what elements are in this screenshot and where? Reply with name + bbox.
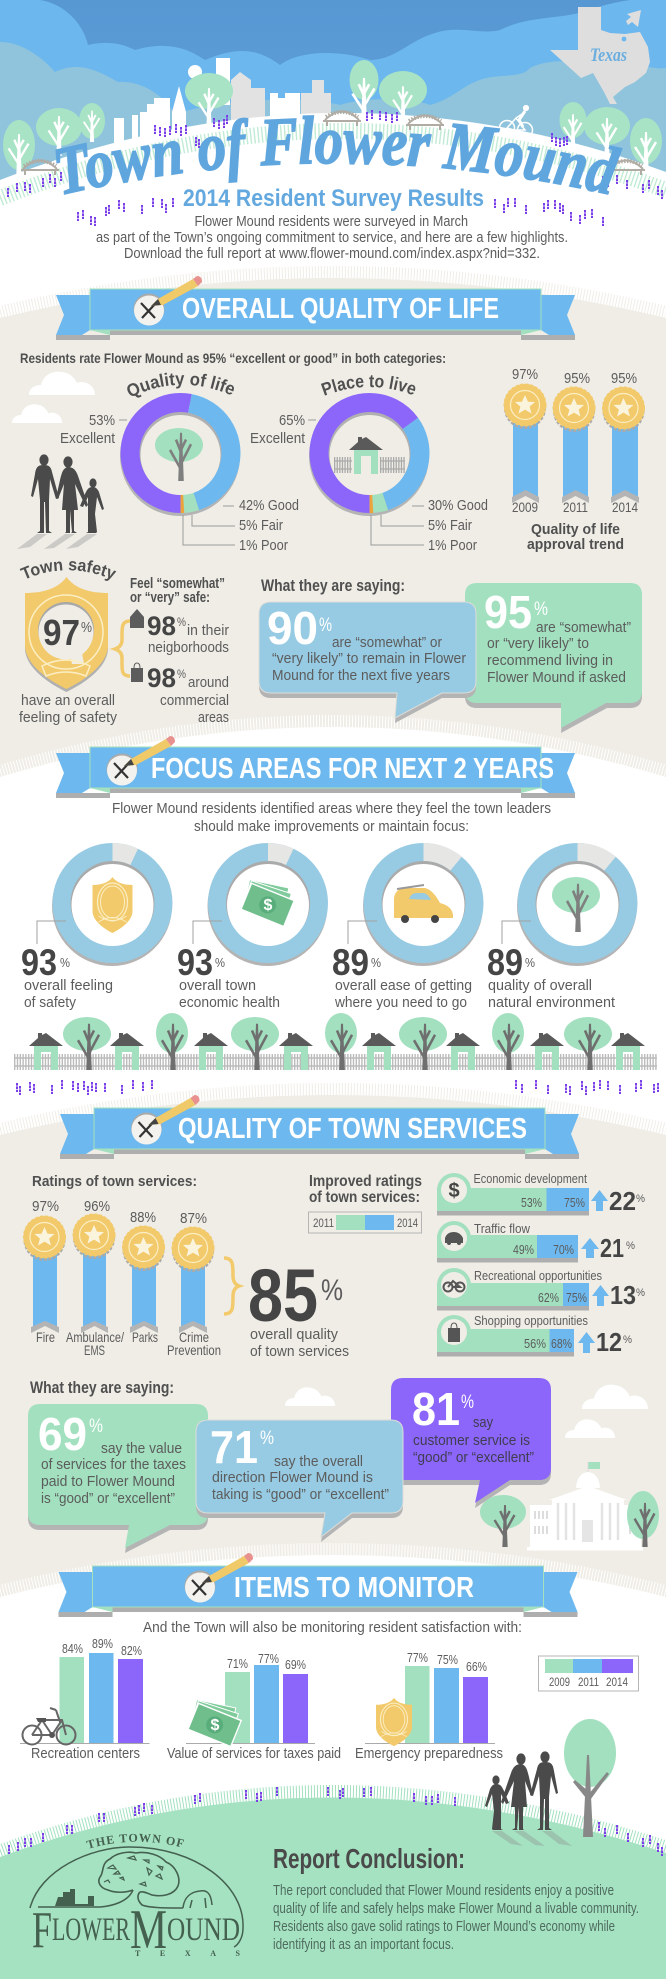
speech bubble: 71%: 71 — [210, 1421, 258, 1473]
logo: town of flower mound: F — [32, 1902, 52, 1959]
bar chart: recreation centers — [20, 1636, 150, 1762]
section heading: items to monitor: ITEMS TO MONITOR — [234, 1572, 474, 1604]
green hill — [0, 1791, 666, 1979]
Texas map with locator: Texas — [590, 45, 627, 66]
page background: sky — [0, 0, 666, 300]
bar chart: emergency preparedness — [355, 1650, 503, 1762]
focus intro: should make improvements or maintain focus: — [194, 818, 469, 835]
logo: town of flower mound: OUND — [167, 1912, 240, 1948]
speech bubble: 69% — [28, 1404, 208, 1553]
focus intro — [112, 800, 551, 835]
chart legend: 2014 — [606, 1675, 628, 1689]
donut: place to live: 30% Good — [428, 497, 488, 514]
city skyline — [114, 58, 331, 150]
town safety badge: % — [81, 619, 92, 636]
tree — [564, 1719, 616, 1837]
icon: family — [17, 454, 104, 549]
bar: economic development: 22 — [609, 1186, 636, 1216]
feel safe stats: % — [177, 615, 186, 629]
feel safe stats: in their — [187, 622, 229, 639]
bar: economic development: $ — [448, 1180, 460, 1202]
speech bubble: 90%: 90 — [267, 602, 318, 654]
intro text: Download the full report at www.flower-mound.com/index.aspx?nid=332. — [124, 245, 540, 262]
focus donut: economy: overall town — [179, 977, 256, 994]
lavender on green hill — [9, 1787, 662, 1856]
focus donut: economy: $ — [264, 897, 273, 914]
speech bubble: 90%: are “somewhat” or — [332, 634, 442, 651]
feel safe stats: around — [188, 674, 229, 691]
donut: quality of life: Excellent — [60, 430, 116, 447]
section heading: quality of town services: QUALITY OF TOWN SERVICES — [178, 1113, 527, 1145]
bar chart: recreation centers: 89% — [92, 1636, 113, 1651]
speech bubble: 90% — [259, 602, 476, 723]
speech bubble: 81%: “good” or “excellent” — [413, 1449, 534, 1466]
donut: quality of life: 53% — [89, 412, 115, 429]
feel safe stats — [115, 575, 229, 726]
85% overall quality: of town services — [250, 1343, 349, 1360]
chart legend — [538, 1656, 638, 1691]
focus donut: getting around: % — [371, 955, 381, 970]
section background: beige 2 — [0, 1089, 666, 1597]
logo: town of flower mound: M — [130, 1899, 167, 1961]
speech bubble: 81%: 81 — [412, 1383, 460, 1435]
focus donut: getting around: 89 — [332, 942, 369, 983]
approval trend ribbons: 95% — [564, 370, 590, 387]
approval trend ribbons: Quality of life — [531, 521, 620, 538]
donut: place to live: Excellent — [250, 430, 306, 447]
clouds — [285, 1385, 648, 1438]
bar: economic development: Economic development — [474, 1171, 587, 1186]
85% overall quality — [224, 1254, 349, 1360]
heading: what they are saying: What they are saying: — [30, 1378, 174, 1397]
bar chart: recreation centers: Recreation centers — [31, 1745, 140, 1762]
icon: cyclist — [500, 105, 532, 138]
bar: economic development: 53% — [521, 1195, 542, 1210]
bar: shopping opportunities: 68% — [551, 1336, 572, 1351]
approval trend ribbons: 2011 — [563, 499, 588, 515]
report conclusion text — [273, 1882, 639, 1953]
white hill — [0, 113, 666, 300]
speech bubble: 90%: % — [319, 615, 332, 636]
Texas map with locator — [550, 7, 650, 104]
focus donut: safety: % — [60, 955, 70, 970]
section heading: focus areas — [56, 736, 575, 798]
bar: shopping opportunities: Shopping opportunities — [474, 1313, 588, 1328]
focus donut: natural environment — [487, 843, 638, 1011]
speech bubble: 69%: paid to Flower Mound — [41, 1473, 175, 1490]
donut: place to live: 5% Fair — [428, 517, 472, 534]
section heading: quality of town services — [60, 1095, 579, 1159]
focus donut: safety: overall feeling — [24, 977, 113, 994]
bar: recreational opportunities — [437, 1268, 645, 1310]
donut: place to live: 65% — [279, 412, 305, 429]
ratings of town services: 88% — [130, 1209, 156, 1226]
bar: recreational opportunities: 13 — [610, 1280, 636, 1310]
ratings of town services: 87% — [180, 1210, 207, 1227]
bar chart: value of services: 69% — [285, 1657, 306, 1672]
intro text: as part of the Town’s ongoing commitment to service, and here are a few highlights. — [96, 229, 568, 246]
speech bubble: 90%: Mound for the next five years — [272, 667, 450, 684]
approval trend ribbons: 2009 — [512, 499, 538, 515]
improved ratings legend — [308, 1173, 422, 1233]
speech bubble: 95%: recommend living in — [487, 652, 613, 669]
focus donut: economy: % — [215, 955, 225, 970]
ratings of town services: 96% — [84, 1198, 110, 1215]
bar: economic development — [437, 1171, 645, 1216]
improved ratings legend: of town services: — [309, 1189, 420, 1206]
bar: recreational opportunities: 62% — [538, 1290, 559, 1305]
speech bubble: 95% — [465, 583, 642, 733]
speech bubble: 81%: customer service is — [413, 1432, 530, 1449]
speech bubble: 69%: % — [89, 1416, 103, 1437]
donut: place to live — [250, 375, 488, 554]
ratings of town services: Parks — [132, 1329, 158, 1345]
speech bubble: 95%: % — [534, 599, 548, 620]
monitoring intro: And the Town will also be monitoring resident satisfaction with: — [143, 1619, 522, 1636]
logo: town of flower mound: TEXAS — [135, 1949, 241, 1958]
improved ratings legend: Improved ratings — [309, 1173, 422, 1190]
bar: shopping opportunities: % — [623, 1334, 632, 1346]
intro text: Flower Mound residents were surveyed in March — [194, 213, 468, 230]
focus donut: economy — [177, 843, 328, 1011]
speech bubble: 95%: or “very likely” to — [487, 635, 589, 652]
lead sentence: Residents rate Flower Mound as 95% “excellent or good” in both categories: — [20, 350, 446, 366]
feel safe stats: Feel “somewhat” — [130, 575, 225, 592]
bar chart: recreation centers: 82% — [121, 1643, 142, 1658]
bar: traffic flow: Traffic flow — [474, 1221, 531, 1236]
section heading: overall quality of life: OVERALL QUALITY OF LIFE — [182, 293, 499, 325]
ratings of town services: Fire — [36, 1329, 55, 1345]
chart legend: 2009 — [549, 1675, 570, 1689]
focus donut: safety: 93 — [21, 942, 57, 983]
bar: traffic flow: 21 — [600, 1233, 624, 1263]
bar: economic development: 75% — [564, 1195, 585, 1210]
donut: place to live: 1% Poor — [428, 537, 477, 554]
chart legend: 2011 — [578, 1675, 599, 1689]
heading: what they are saying: What they are saying: — [261, 576, 405, 595]
85% overall quality: 85 — [248, 1254, 318, 1337]
section heading: overall quality of life — [56, 276, 575, 340]
speech bubble: 90%: “very likely” to remain in Flower — [272, 650, 466, 667]
bar chart: emergency preparedness: 66% — [466, 1659, 487, 1674]
focus donut: economy: economic health — [179, 994, 280, 1011]
approval trend ribbons: 95% — [611, 370, 637, 387]
speech bubble: 95%: Flower Mound if asked — [487, 669, 626, 686]
focus donut: natural environment: % — [525, 955, 535, 970]
focus donut: natural environment: quality of overall — [488, 977, 592, 994]
focus intro: Flower Mound residents identified areas where they feel the town leaders — [112, 800, 551, 817]
approval trend ribbons: 2014 — [612, 499, 638, 515]
ratings of town services: Crime — [179, 1329, 209, 1345]
speech bubble: 69%: of services for the taxes — [41, 1456, 186, 1473]
speech bubble: 71%: say the overall — [274, 1453, 363, 1470]
bar: traffic flow: 49% — [513, 1242, 534, 1257]
town safety badge: 97 — [43, 612, 80, 653]
report conclusion heading: Report Conclusion: — [273, 1843, 465, 1874]
ratings of town services: EMS — [84, 1342, 105, 1358]
focus donut: natural environment: 89 — [487, 942, 523, 983]
feel safe stats: areas — [198, 709, 229, 726]
town safety badge: feeling of safety — [19, 709, 117, 726]
bar chart: value of services: 77% — [258, 1651, 279, 1666]
neighborhood row — [14, 1013, 657, 1070]
town safety badge: Town safety — [20, 560, 116, 581]
bar: shopping opportunities: 56% — [524, 1336, 546, 1351]
bar: traffic flow — [437, 1221, 635, 1263]
focus donut: getting around: where you need to go — [334, 994, 467, 1011]
clouds — [12, 372, 95, 423]
bar: recreational opportunities: % — [636, 1287, 645, 1299]
85% overall quality: % — [321, 1274, 343, 1307]
focus donut: getting around: overall ease of getting — [335, 977, 472, 994]
bar: traffic flow: % — [626, 1240, 635, 1252]
ratings of town services — [24, 1173, 221, 1358]
hill fringe — [0, 131, 666, 198]
speech bubble: 95%: 95 — [484, 586, 532, 638]
town safety badge — [19, 560, 117, 726]
logo: town of flower mound: LOWER — [52, 1912, 130, 1948]
feel safe stats: or “very” safe: — [130, 589, 210, 606]
focus donut: natural environment: natural environment — [488, 994, 616, 1011]
donut: quality of life: 5% Fair — [239, 517, 283, 534]
bar chart: emergency preparedness: Emergency preparedness — [355, 1745, 503, 1762]
speech bubble: 81%: say — [473, 1414, 493, 1431]
section heading: items to monitor — [58, 1553, 578, 1617]
lavender header — [8, 110, 662, 226]
feel safe stats: 98 — [147, 663, 176, 693]
feel safe stats: % — [177, 667, 186, 681]
ratings of town services: Ambulance/ — [66, 1329, 124, 1345]
speech bubble: 71%: % — [260, 1428, 274, 1449]
approval trend ribbons: approval trend — [527, 536, 624, 553]
benches — [21, 112, 645, 175]
bar: shopping opportunities — [437, 1313, 632, 1357]
focus donut: safety: of safety — [24, 994, 76, 1011]
bar chart: value of services: $ — [211, 1717, 220, 1734]
bar chart: value of services: Value of services for taxes paid — [167, 1745, 341, 1762]
speech bubble: 81%: % — [461, 1392, 474, 1413]
focus donut: getting around — [332, 843, 484, 1011]
bar: recreational opportunities: 75% — [566, 1290, 587, 1305]
speech bubble: 71% — [196, 1420, 403, 1542]
ratings of town services: Ratings of town services: — [32, 1173, 197, 1190]
ratings of town services: Prevention — [167, 1342, 221, 1358]
speech bubble: 69%: is “good” or “excellent” — [41, 1490, 175, 1507]
donut: quality of life: 1% Poor — [239, 537, 288, 554]
donut: place to live: Place to live — [321, 375, 416, 396]
bar chart: emergency preparedness: 77% — [407, 1650, 428, 1665]
bar: shopping opportunities: 12 — [596, 1327, 622, 1357]
focus donut: economy: 93 — [177, 942, 213, 983]
subtitle: 2014 Resident Survey Results — [183, 185, 484, 212]
feel safe stats: neigborhoods — [148, 639, 229, 656]
bar chart: value of services — [167, 1651, 341, 1762]
bar: traffic flow: 70% — [553, 1242, 574, 1257]
logo: town of flower mound — [29, 1834, 244, 1961]
speech bubble: 71%: direction Flower Mound is — [212, 1469, 373, 1486]
ratings of town services: 97% — [32, 1198, 59, 1215]
bar chart: emergency preparedness: 75% — [437, 1652, 458, 1667]
donut: quality of life: 42% Good — [239, 497, 299, 514]
trees on hill — [3, 60, 662, 174]
85% overall quality: overall quality — [250, 1326, 338, 1343]
bar chart: recreation centers: 84% — [62, 1641, 83, 1656]
lavender row — [17, 1080, 658, 1095]
section heading: focus areas: FOCUS AREAS FOR NEXT 2 YEARS — [151, 753, 554, 785]
section background: beige 1 — [0, 272, 666, 777]
donut: quality of life: Quality of life — [127, 372, 234, 398]
feel safe stats: 98 — [147, 611, 176, 641]
bar: recreational opportunities: Recreational opportunities — [474, 1268, 602, 1283]
title: Town of Flower Mound — [56, 115, 623, 195]
feel safe stats: commercial — [160, 692, 229, 709]
speech bubble: 71%: taking is “good” or “excellent” — [212, 1486, 389, 1503]
intro text — [96, 213, 568, 262]
logo: town of flower mound: THE TOWN OF — [86, 1834, 184, 1848]
bar: economic development: % — [636, 1193, 645, 1205]
speech bubble: 81% — [391, 1378, 551, 1508]
icon: family on hill — [485, 1751, 572, 1846]
approval trend ribbons: 97% — [512, 366, 538, 383]
bar chart: value of services: 71% — [227, 1656, 248, 1671]
donut: quality of life — [60, 372, 299, 554]
speech bubble: 95%: are “somewhat” — [536, 619, 631, 636]
improved ratings legend: 2014 — [397, 1216, 418, 1230]
speech bubble: 69%: say the value — [101, 1440, 182, 1457]
report conclusion text: identifying it as an important focus. — [273, 1936, 454, 1953]
improved ratings legend: 2011 — [313, 1216, 334, 1230]
approval trend ribbons — [504, 366, 644, 553]
focus donut: safety — [21, 843, 172, 1011]
icon: town hall with trees — [480, 1462, 659, 1550]
speech bubble: 69%: 69 — [38, 1408, 87, 1460]
town safety badge: have an overall — [21, 692, 115, 709]
